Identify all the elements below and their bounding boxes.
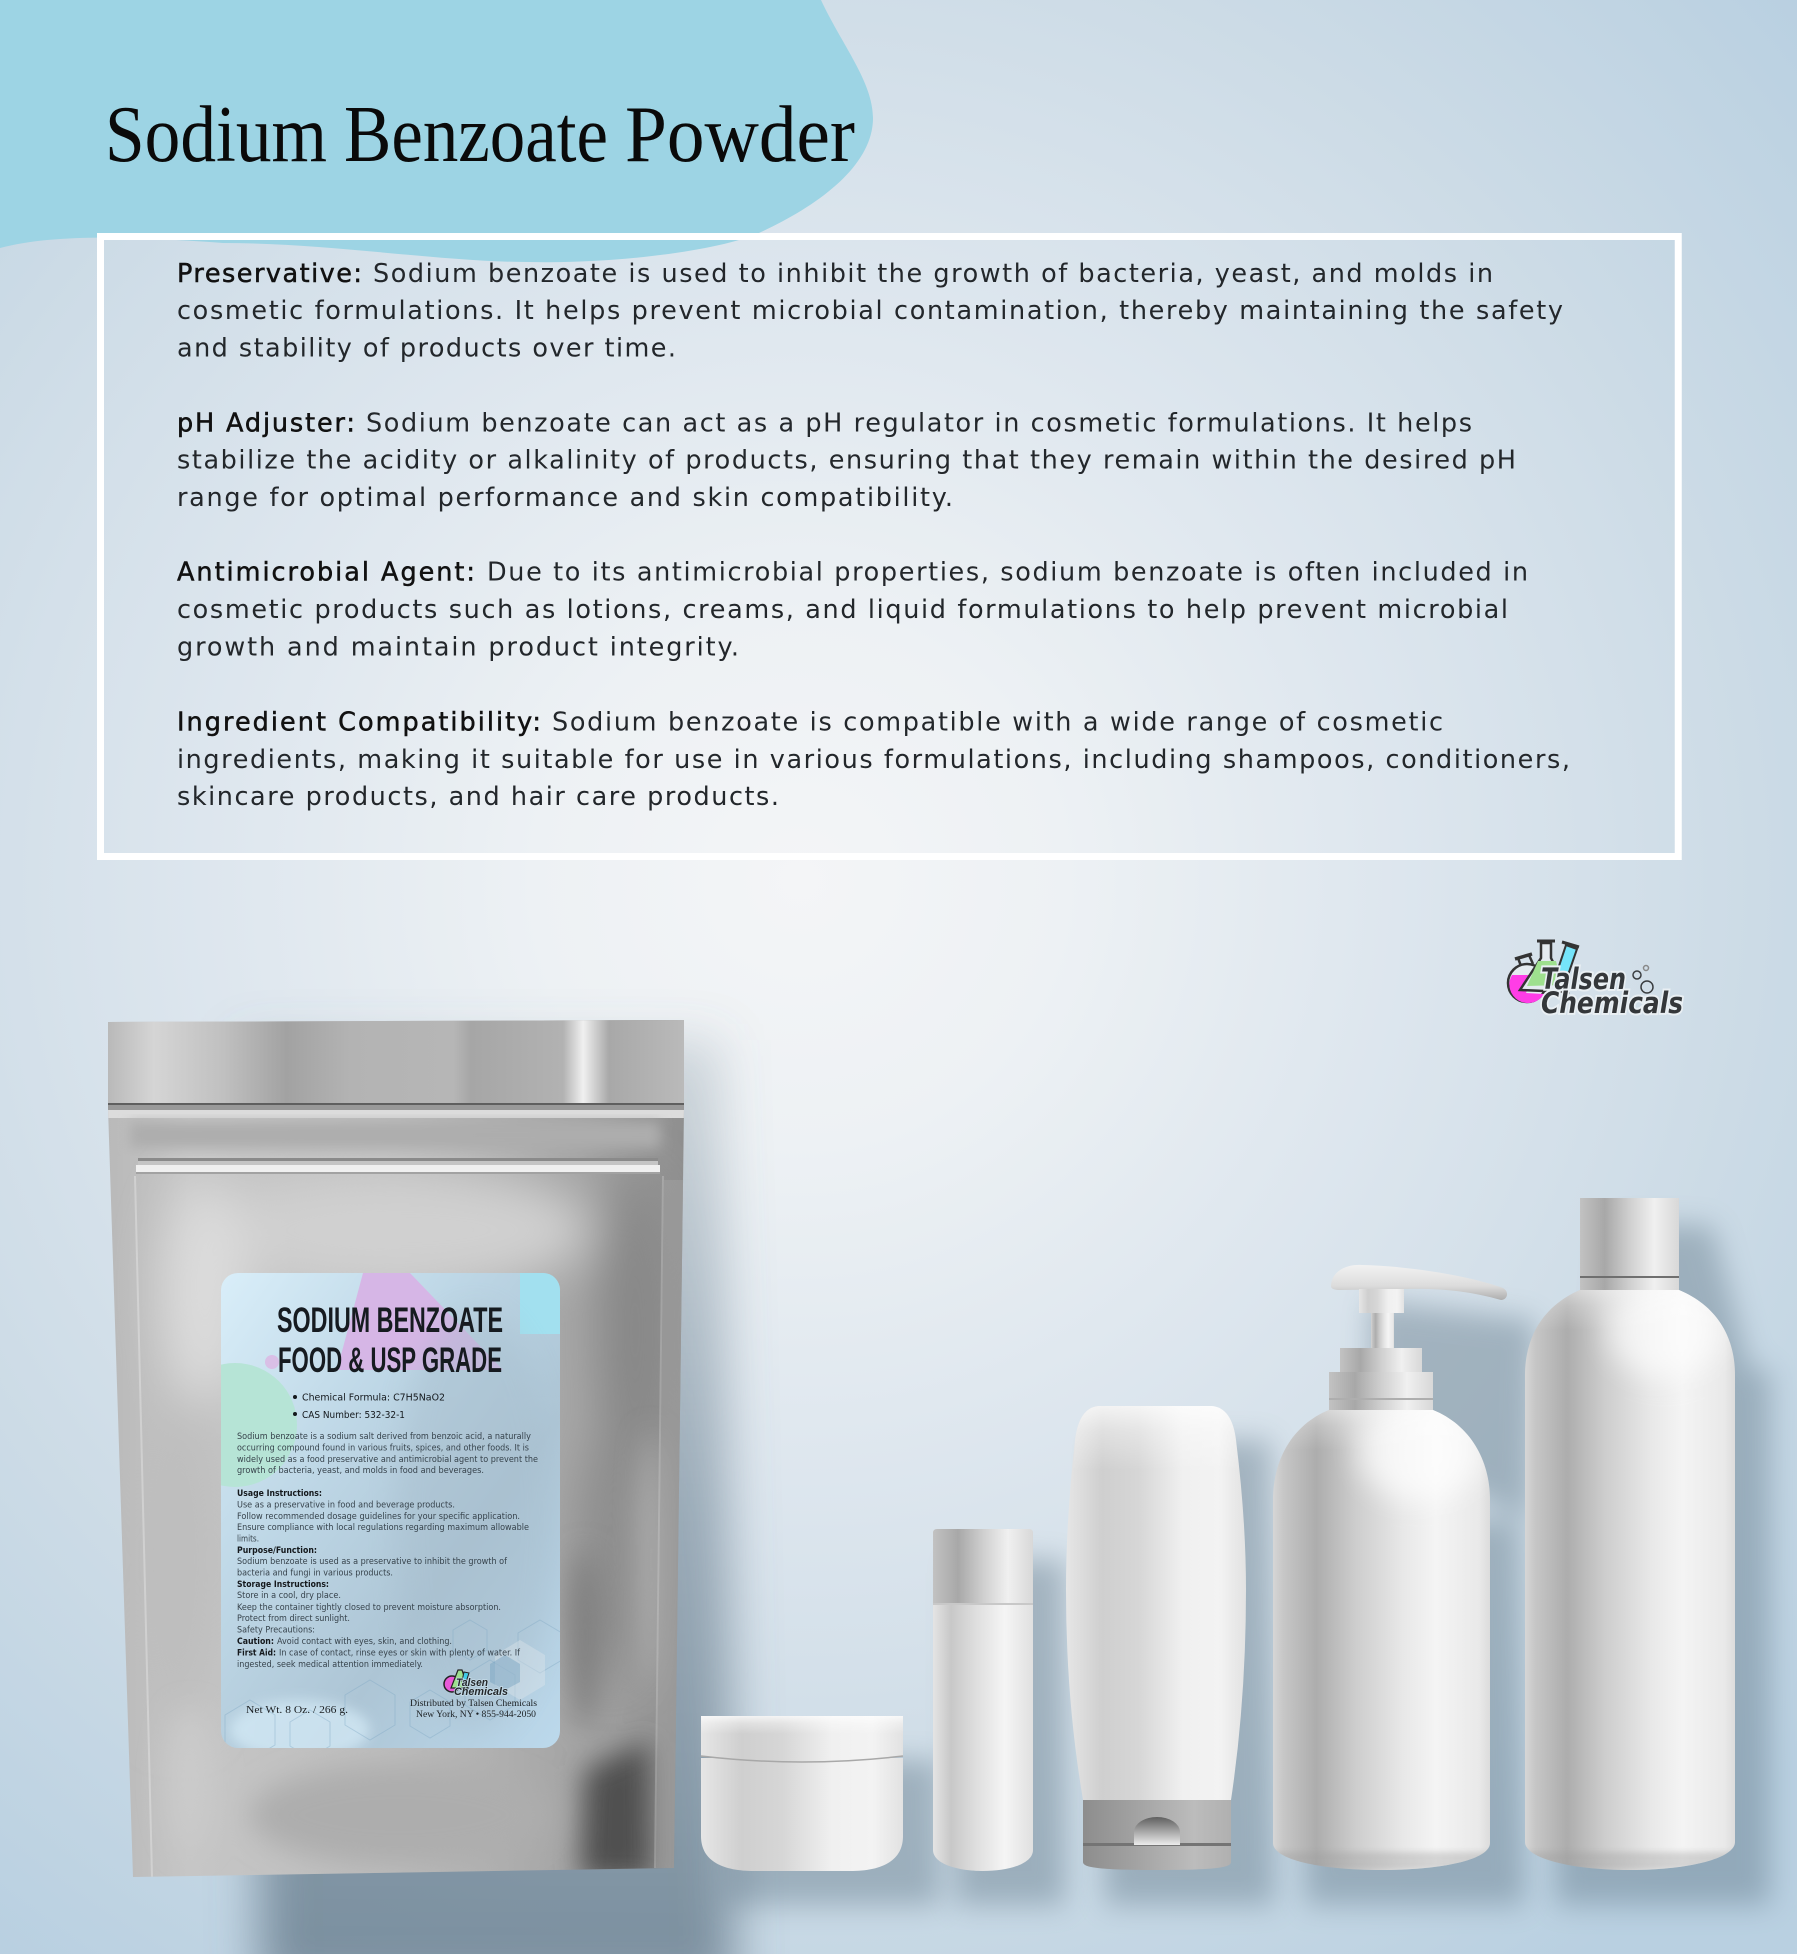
label background shapes xyxy=(221,1273,560,1748)
label distributor: New York, NY • 855-944-2050 xyxy=(416,1710,536,1720)
label description text: Use as a preservative in food and beverage products. xyxy=(237,1500,455,1510)
label description text: bacteria and fungi in various products. xyxy=(237,1568,393,1578)
label small logo xyxy=(444,1670,508,1698)
label description text: Protect from direct sunlight. xyxy=(237,1614,350,1624)
label description text xyxy=(237,1432,538,1670)
slim bottle body xyxy=(933,1605,1033,1871)
text block: antimicrobial agent xyxy=(177,558,1528,662)
label small logo: Talsen xyxy=(456,1677,488,1689)
product: foil pouch xyxy=(108,1020,684,1880)
text block: preservative: and stability of products over time. xyxy=(177,334,676,364)
product: slim bottle xyxy=(933,1529,1033,1871)
label description text: Sodium benzoate is a sodium salt derived from benzoic acid, a naturally xyxy=(237,1432,531,1442)
label description text: ingested, seek medical attention immediately. xyxy=(237,1660,423,1670)
label description text: Purpose/Function: xyxy=(237,1546,317,1556)
text block: antimicrobial agent: growth and maintain product integrity. xyxy=(177,632,739,662)
label description text: Usage Instructions: xyxy=(237,1489,322,1499)
pouch foil highlights xyxy=(108,1020,684,1880)
jar body xyxy=(701,1758,903,1871)
label description text: widely used as a food preservative and antimicrobial agent to prevent the xyxy=(237,1455,538,1465)
text block: preservative: Preservative: xyxy=(177,259,362,289)
tall bottle shoulder highlight xyxy=(1525,1282,1735,1870)
logo wordmark xyxy=(1541,962,1683,1020)
icon: round flask xyxy=(1508,954,1546,1003)
decorative title blob xyxy=(0,0,873,262)
label heading: SODIUM BENZOATE xyxy=(277,1301,503,1340)
text block: pH adjuster: range for optimal performance and skin compatibility. xyxy=(177,483,953,513)
label small logo: Chemicals xyxy=(454,1686,508,1698)
text block: pH adjuster xyxy=(177,408,1516,513)
label heading xyxy=(277,1301,503,1380)
label bullet facts xyxy=(293,1392,445,1421)
product: tall bottle xyxy=(1525,1198,1735,1870)
pump head xyxy=(1331,1265,1507,1300)
slim bottle cap xyxy=(933,1529,1033,1603)
tall bottle cap xyxy=(1580,1198,1679,1276)
product: jar xyxy=(701,1716,903,1871)
icon: bubbles xyxy=(1633,966,1653,993)
text block: pH adjuster: stabilize the acidity or alkalinity of products, ensuring that they remain within the desired pH xyxy=(177,446,1516,476)
text block: ingredient compatibility: Sodium benzoate is compatible with a wide range of cosmetic xyxy=(552,708,1443,738)
label description text: Keep the container tightly closed to prevent moisture absorption. xyxy=(237,1603,501,1613)
title: Powder xyxy=(625,91,855,179)
label description text: Caution: xyxy=(237,1637,274,1647)
text block: ingredient compatibility: skincare products, and hair care products. xyxy=(177,782,779,812)
product label xyxy=(221,1273,560,1748)
label bullet facts: Chemical Formula: C7H5NaO2 xyxy=(302,1392,445,1404)
title: Sodium xyxy=(105,91,327,179)
tall bottle body xyxy=(1525,1290,1735,1870)
text block: pH adjuster: pH Adjuster: xyxy=(177,408,355,438)
text block: preservative: Sodium benzoate is used to inhibit the growth of bacteria, yeast, and molds in xyxy=(373,259,1493,289)
panel: product uses xyxy=(100,236,1678,856)
label description text: Ensure compliance with local regulations regarding maximum allowable xyxy=(237,1523,529,1533)
label distributor: Distributed by Talsen Chemicals xyxy=(410,1699,537,1709)
label description text: Safety Precautions: xyxy=(237,1626,315,1636)
product: pump bottle xyxy=(1273,1265,1507,1870)
text block: ingredient compatibility: Ingredient Compatibility: xyxy=(177,708,541,738)
product: squeeze tube xyxy=(1066,1406,1246,1870)
icon: test tube xyxy=(1557,942,1579,975)
label description text: Storage Instructions: xyxy=(237,1580,329,1590)
label description text: growth of bacteria, yeast, and molds in food and beverages. xyxy=(237,1466,484,1476)
pouch zipper xyxy=(138,1158,658,1161)
logo wordmark: Talsen xyxy=(1541,962,1626,996)
text block: ingredient compatibility: ingredients, making it suitable for use in various formulations, including shampoos, conditioners, xyxy=(177,745,1570,775)
pouch body xyxy=(108,1020,684,1877)
label description text: occurring compound found in various fruits, spices, and other foods. It is xyxy=(237,1444,529,1454)
label bullet facts: CAS Number: 532-32-1 xyxy=(302,1410,405,1421)
label description text: In case of contact, rinse eyes or skin with plenty of water. If xyxy=(279,1648,521,1658)
tube flip cap xyxy=(1083,1800,1231,1870)
text block: antimicrobial agent: cosmetic products such as lotions, creams, and liquid formulations to help prevent microbial xyxy=(177,595,1508,625)
label description text: Store in a cool, dry place. xyxy=(237,1591,341,1601)
label description text: Follow recommended dosage guidelines for your specific application. xyxy=(237,1512,520,1522)
pump nozzle housing xyxy=(1359,1289,1404,1313)
pouch header strip xyxy=(108,1020,684,1103)
icon: conical flask xyxy=(1520,941,1568,992)
text block: ingredient compatibility xyxy=(177,708,1570,812)
label description text: limits. xyxy=(237,1534,259,1544)
label description text: Avoid contact with eyes, skin, and clothing. xyxy=(277,1637,452,1647)
label description text: First Aid: xyxy=(237,1648,276,1658)
tube body xyxy=(1066,1406,1246,1800)
pump stem xyxy=(1371,1313,1394,1348)
panel border xyxy=(100,236,1678,856)
text block: pH adjuster: Sodium benzoate can act as a pH regulator in cosmetic formulations. It helps xyxy=(366,408,1472,438)
label heading: FOOD & USP GRADE xyxy=(278,1341,502,1380)
text block: antimicrobial agent: Due to its antimicrobial properties, sodium benzoate is often included in xyxy=(487,558,1528,588)
title: Benzoate xyxy=(344,91,608,179)
label net weight: Net Wt. 8 Oz. / 266 g. xyxy=(246,1705,348,1716)
text block: preservative xyxy=(177,259,1563,364)
pump collar xyxy=(1340,1348,1422,1372)
pump bottle body xyxy=(1273,1410,1490,1870)
pouch side seams xyxy=(135,1176,152,1877)
product shadows xyxy=(240,1040,1770,1954)
text block: antimicrobial agent: Antimicrobial Agent: xyxy=(177,558,475,588)
text block: preservative: cosmetic formulations. It helps prevent microbial contamination, thereby maintaining the safety xyxy=(177,296,1563,326)
logo wordmark: Chemicals xyxy=(1541,986,1683,1020)
label distributor xyxy=(410,1699,537,1720)
title xyxy=(105,91,855,179)
pump bottle shoulder highlight xyxy=(1273,1398,1490,1870)
logo: Talsen Chemicals xyxy=(1508,941,1683,1020)
jar lid xyxy=(701,1716,903,1762)
tube cap notch xyxy=(1134,1817,1180,1845)
label description text: Sodium benzoate is used as a preservative to inhibit the growth of xyxy=(237,1557,508,1567)
